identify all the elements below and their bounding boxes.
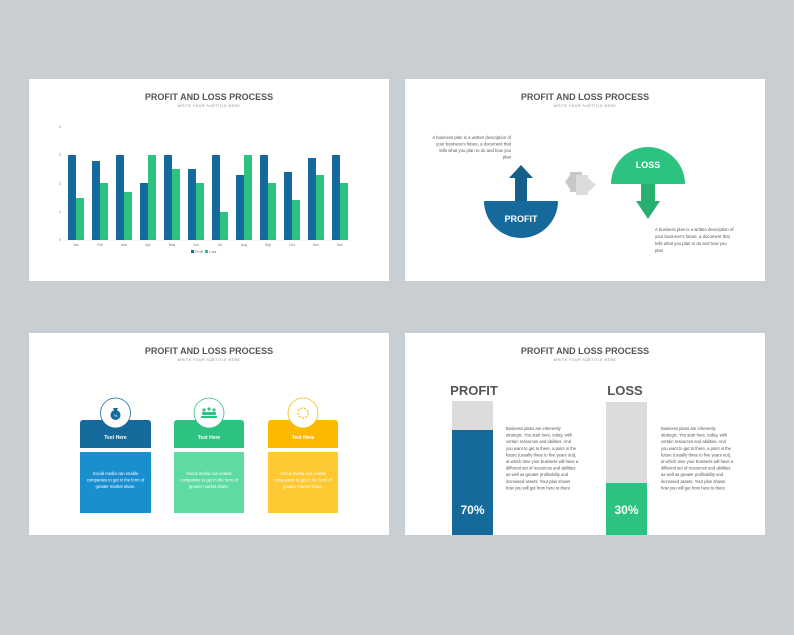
profit text block: increased assets. Your plan shows: [506, 479, 570, 484]
profit semicircle: [484, 201, 558, 238]
title: PROFIT AND LOSS PROCESS: [521, 346, 649, 356]
subtitle: WRITE YOUR SUBTITLE HERE: [554, 104, 617, 108]
loss text block: increased assets. Your plan shows: [661, 479, 725, 484]
bar chart: Feb: [97, 243, 103, 247]
loss text block: you want to get to there, a point in the: [661, 446, 732, 451]
loss text block: certain resources and abilities. And: [661, 439, 727, 444]
subtitle: WRITE YOUR SUBTITLE HERE: [554, 358, 617, 362]
profit text block: you want to get to there, a point in the: [506, 446, 577, 451]
card 2: Text Here: [198, 435, 220, 441]
bar chart: 1: [59, 210, 61, 214]
profit text block: [506, 426, 579, 490]
card 3: greater market share.: [283, 484, 323, 489]
bar chart: Sep: [265, 243, 271, 247]
bar chart: 3: [59, 153, 61, 157]
card 3: Social media can enable: [280, 471, 326, 476]
profit bar 70%: 70%: [460, 503, 485, 517]
loss text block: at which time your business will have a: [661, 459, 734, 464]
loss bar 30%: [606, 402, 647, 535]
loss text block: how you will get from here to there.: [661, 485, 726, 490]
text block right: tells what you plan to do and how you: [655, 241, 727, 246]
icon: money bag: %: [114, 413, 118, 418]
bar chart: 2: [59, 182, 61, 186]
profit text block: future (usually three to five years out),: [506, 452, 576, 457]
icon: cycle: [298, 408, 308, 418]
card 2: Social media can enable: [186, 471, 232, 476]
panel: profit loss arrows slide: [405, 79, 765, 281]
bar chart: 4: [59, 125, 61, 129]
card 2: greater market share.: [189, 484, 229, 489]
profit semicircle: PROFIT: [504, 214, 538, 224]
profit bar 70%: [452, 401, 493, 535]
text block left: A business plan is a written description of: [432, 135, 512, 140]
text block right: [655, 227, 734, 253]
card 1: greater market share.: [95, 484, 136, 489]
subtitle: WRITE YOUR SUBTITLE HERE: [178, 104, 241, 108]
icon: profit up arrow: [509, 165, 533, 202]
loss text block: [661, 426, 734, 490]
bar chart: May: [169, 243, 176, 247]
panel: three cards slide: [29, 333, 389, 535]
text block right: your business's future, a document that: [655, 234, 731, 239]
card 1: companies to get in the form of: [87, 478, 145, 482]
bar chart: Mar: [121, 243, 128, 247]
card 1: [80, 398, 151, 513]
bar chart: Jul: [218, 243, 222, 247]
card 3: companies to get in the form of: [274, 478, 333, 482]
loss heading: LOSS: [607, 383, 643, 398]
bar chart: 0: [59, 238, 61, 242]
title: PROFIT AND LOSS PROCESS: [145, 92, 273, 102]
card 2: companies to get in the form of: [180, 478, 239, 482]
loss text block: Business plans are inherently: [661, 426, 717, 431]
text block right: A business plan is a written description of: [655, 227, 734, 232]
loss text block: future (usually three to five years out),: [661, 452, 731, 457]
legend: Profit: [195, 250, 203, 254]
bar chart: Jan: [73, 243, 79, 247]
profit text block: at which time your business will have a: [506, 459, 579, 464]
title: PROFIT AND LOSS PROCESS: [145, 346, 273, 356]
icon: loss down arrow: [636, 184, 660, 219]
bar chart: Oct: [289, 243, 295, 247]
text block left: tells what you plan to do and how you: [439, 148, 512, 153]
bar chart: [59, 125, 350, 254]
card 1: Text Here: [104, 435, 127, 441]
profit text block: Business plans are inherently: [506, 426, 562, 431]
text block left: plan: [503, 154, 512, 160]
card 3: [268, 398, 338, 513]
subtitle: WRITE YOUR SUBTITLE HERE: [178, 358, 241, 362]
legend: Loss: [209, 250, 217, 254]
bar chart: Dec: [337, 243, 343, 247]
title: PROFIT AND LOSS PROCESS: [521, 92, 649, 102]
profit text block: certain resources and abilities. And: [506, 439, 572, 444]
loss text block: different set of resources and abilities: [661, 466, 730, 471]
profit text block: how you will get from here to there.: [506, 485, 571, 490]
card 3: Text Here: [292, 435, 314, 441]
card 1: Social media can enable: [93, 471, 139, 476]
legend: [191, 250, 217, 254]
loss dome: [611, 147, 685, 184]
text block right: plan: [655, 248, 664, 253]
text block left: your business's future, a document that: [436, 142, 512, 146]
icon: team: [201, 407, 217, 418]
loss dome: LOSS: [636, 160, 660, 170]
profit text block: as well as greater profitability and: [506, 472, 569, 477]
bar chart: Apr: [145, 243, 152, 247]
loss text block: strategic. You start here, today, with: [661, 433, 728, 438]
panel: percentage bars slide: [405, 333, 765, 535]
profit text block: different set of resources and abilities: [506, 466, 575, 471]
loss bar 30%: 30%: [614, 503, 639, 517]
profit heading: PROFIT: [450, 383, 498, 398]
bar chart: Jun: [193, 243, 199, 247]
card 2: [174, 398, 244, 513]
profit text block: strategic. You start here, today, with: [506, 433, 573, 438]
bar chart: Aug: [241, 243, 247, 247]
text block left: [432, 135, 512, 160]
bar chart: Nov: [313, 243, 319, 247]
icon: exchange arrows: [565, 172, 596, 195]
loss text block: as well as greater profitability and: [661, 472, 724, 477]
panel: bar chart slide: [29, 79, 389, 281]
